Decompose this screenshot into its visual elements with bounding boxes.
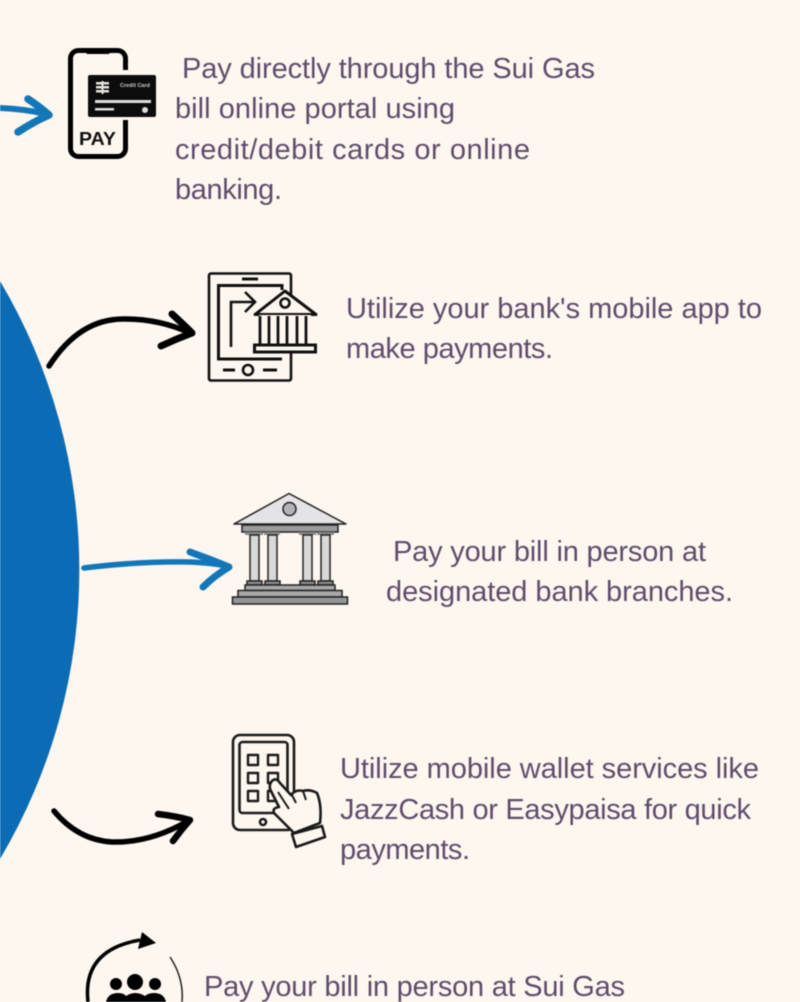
icon: phone with hand tapping [233,735,325,847]
text block: mobile wallets [340,753,759,866]
icon: phone with credit card and PAY: Credit Card [120,83,150,89]
arrow: to mobile wallet [54,811,190,842]
text block: online portal: Pay directly through the Sui Gas [182,53,595,85]
arrow: to mobile banking app [49,314,192,366]
text block: online portal: banking. [175,174,282,206]
text block: online portal [175,53,595,206]
text block: online portal: credit/debit cards or online [175,134,530,166]
text block: mobile banking app: Utilize your bank's mobile app to [346,293,762,325]
text block: bank branches [386,536,733,608]
icon: phone with credit card and PAY: PAY [79,129,116,149]
arrow: to online portal [0,99,49,132]
text block: online portal: bill online portal using [175,93,455,125]
text block: mobile wallets: Utilize mobile wallet services like [340,753,759,785]
arrow: to bank branch [84,552,229,587]
icon: phone with credit card and PAY [70,49,156,156]
text block: mobile banking app: make payments. [346,333,553,365]
text block: bank branches: designated bank branches. [386,576,733,608]
text block: bank branches: Pay your bill in person at [393,536,706,568]
text block: mobile wallets: payments. [340,834,470,866]
icon: people in circular arrow [87,932,182,1002]
icon: tablet with bank [209,274,316,380]
icon: bank building [232,494,348,604]
text block: mobile banking app [346,293,762,365]
blue central circle [0,281,79,859]
text block: mobile wallets: JazzCash or Easypaisa for quick [340,794,752,826]
